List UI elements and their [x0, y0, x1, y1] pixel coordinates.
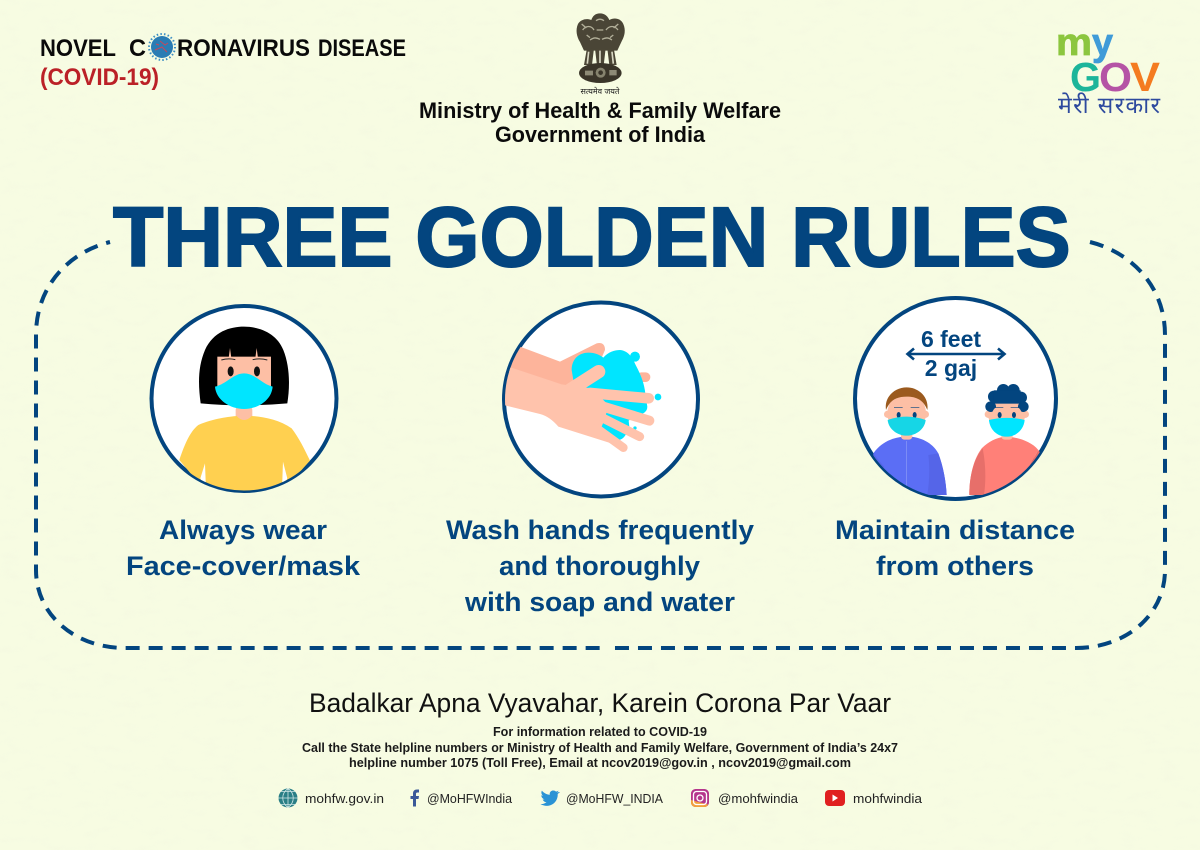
- caption: Face-cover/mask: [126, 551, 361, 581]
- caption: and thoroughly: [499, 551, 700, 581]
- logo: mygov: y: [1092, 22, 1113, 64]
- caption: Wash hands frequently: [446, 515, 754, 545]
- logo: mygov: मेरी सरकार: [1058, 92, 1161, 118]
- panel: wash hands: [446, 302, 754, 617]
- caption: [126, 515, 361, 581]
- ministry heading: Ministry of Health & Family Welfare: [419, 98, 781, 123]
- header: novel coronavirus disease: DISEASE: [318, 35, 406, 62]
- youtube link: [825, 790, 922, 806]
- header: novel coronavirus disease: NOVEL: [40, 35, 116, 62]
- icon: national emblem: [577, 13, 625, 83]
- icon: coronavirus particle: [149, 34, 175, 60]
- caption: from others: [876, 551, 1034, 581]
- helpline information: helpline number 1075 (Toll Free), Email at ncov2019@gov.in , ncov2019@gmail.com: [349, 756, 851, 770]
- ministry heading: [419, 98, 781, 147]
- distance label: 6 feet: 6 feet: [921, 326, 981, 352]
- website link: mohfw.gov.in: [305, 792, 384, 806]
- ministry heading: Government of India: [495, 122, 706, 147]
- header: novel coronavirus disease: RONAVIRUS: [177, 35, 310, 62]
- logo: mygov: [1056, 22, 1161, 118]
- youtube link: mohfwindia: [853, 792, 922, 806]
- helpline information: Call the State helpline numbers or Ministry of Health and Family Welfare, Government of India’s 24x7: [302, 741, 898, 755]
- social links row: [278, 788, 922, 808]
- caption: [446, 515, 754, 617]
- instagram link: [691, 789, 798, 807]
- illustration: hands washing with soap: [503, 302, 698, 496]
- facebook link: @MoHFWIndia: [427, 792, 512, 806]
- illustration: girl wearing mask: [152, 306, 336, 503]
- header: novel coronavirus disease: C: [129, 35, 146, 62]
- caption: [835, 515, 1075, 581]
- header: novel coronavirus disease: [40, 34, 406, 62]
- header: covid-19: (COVID-19): [40, 64, 159, 91]
- person left: [873, 387, 947, 495]
- helpline information: [302, 725, 898, 770]
- twitter link: @MoHFW_INDIA: [566, 792, 664, 806]
- person right: [969, 384, 1040, 495]
- panel: wear a mask: [126, 306, 361, 581]
- logo: mygov: m: [1056, 22, 1092, 64]
- logo: mygov: V: [1130, 54, 1161, 100]
- helpline information: For information related to COVID-19: [493, 725, 707, 739]
- facebook link: [410, 790, 512, 806]
- illustration: two people six feet apart: [855, 298, 1056, 499]
- distance label: 2 gaj: 2 gaj: [925, 355, 977, 381]
- website link: [278, 788, 384, 808]
- panel: maintain distance: [835, 298, 1075, 581]
- logo: mygov: G: [1070, 54, 1101, 100]
- dashed frame: [36, 242, 1165, 648]
- caption: with soap and water: [464, 587, 736, 617]
- caption: Always wear: [159, 515, 328, 545]
- instagram link: @mohfwindia: [718, 792, 798, 806]
- main title: THREE GOLDEN RULES: [113, 190, 1071, 284]
- logo: mygov: O: [1099, 54, 1132, 100]
- distance arrow: [908, 348, 1004, 360]
- tagline: Badalkar Apna Vyavahar, Karein Corona Par Vaar: [309, 688, 891, 718]
- emblem motto: सत्यमेव जयते: [581, 86, 620, 96]
- caption: Maintain distance: [835, 515, 1075, 545]
